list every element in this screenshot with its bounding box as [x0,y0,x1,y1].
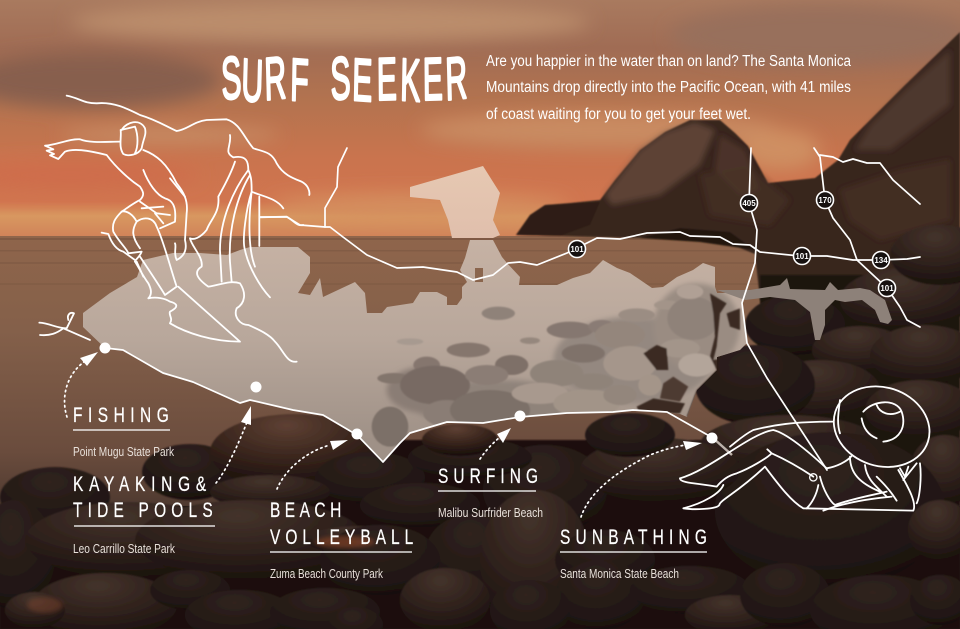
intro paragraph [486,53,851,123]
illustration: sunbather with hat [680,374,940,511]
label: beach volleyball: BEACH [270,497,341,522]
activity markers [100,342,718,444]
label: beach volleyball [270,497,413,581]
arrow: kayaking [216,406,251,483]
arrow: sunbathing [581,441,702,517]
label: fishing [73,402,174,459]
road shield 101 central [794,248,810,264]
intro paragraph: Are you happier in the water than on land? The Santa Monica [486,53,851,70]
arrow: surfing [480,428,511,459]
label: surfing [438,463,543,520]
label: beach volleyball: VOLLEYBALL [270,524,413,549]
label: sunbathing: SUNBATHING [560,524,707,549]
label: kayaking and tide pools: KAYAKING& [73,471,207,496]
intro paragraph: Mountains drop directly into the Pacific Ocean, with 41 miles [486,79,851,96]
label: kayaking and tide pools: TIDE POOLS [73,497,213,522]
background: cliffs [516,32,960,300]
road shield 405: 405 [742,199,756,208]
label: fishing: FISHING [73,402,169,427]
coastline [105,348,713,462]
background: rocks [0,225,960,629]
label: sunbathing: Santa Monica State Beach [560,566,679,581]
road shield 101 west [568,240,586,258]
label: kayaking and tide pools [73,471,215,556]
road shield 101 west: 101 [570,245,584,254]
road shield 101 east: 101 [880,284,894,293]
label: fishing: Point Mugu State Park [73,444,174,459]
arrow: beach volleyball [277,440,348,489]
map: land overlay [83,166,892,462]
title: SURFSEEKER [220,44,468,116]
road shield 134 [872,252,890,268]
cream park block [410,166,500,238]
road shield 101 central: 101 [795,252,809,261]
background: sky [0,0,960,240]
road shield 170 [816,192,834,208]
road shield 134: 134 [874,256,888,265]
label: surfing: SURFING [438,463,538,488]
map: highways [105,148,920,470]
road shield 170: 170 [818,196,832,205]
road shield 405 [740,194,758,212]
map land fill [83,240,747,462]
intro paragraph: of coast waiting for you to get your feet wet. [486,106,751,123]
label: sunbathing [560,524,707,581]
arrow: fishing [65,352,98,417]
river strip [717,278,892,340]
road shield 101 east [878,280,896,296]
misty rocks inside land [372,283,740,447]
label: kayaking and tide pools: Leo Carrillo State Park [73,541,175,556]
illustration: surfer and wave [39,96,309,362]
label: beach volleyball: Zuma Beach County Park [270,566,383,581]
label: surfing: Malibu Surfrider Beach [438,505,543,520]
background: sea [0,236,960,506]
small brown parcel [475,268,483,282]
